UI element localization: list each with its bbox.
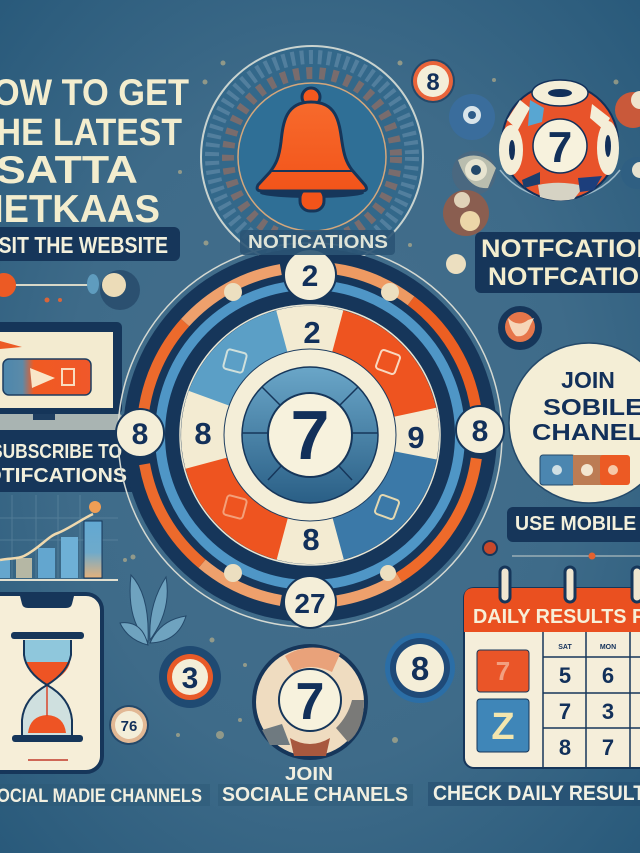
ring balls: 2 <box>302 260 318 293</box>
icon: leaves <box>120 575 186 645</box>
wheel segments <box>178 303 442 567</box>
ring balls <box>116 249 504 628</box>
icon: bell dial <box>201 46 423 268</box>
label: notifications under bell <box>240 230 395 255</box>
panel: join mobile channel: CHANEL <box>532 419 640 445</box>
icon: small lottery balls <box>411 59 640 236</box>
calendar: daily results: Z <box>491 706 515 748</box>
label: notifications under bell: NOTICATIONS <box>248 232 388 252</box>
icon: number 76 ball: 76 <box>121 718 137 735</box>
calendar: daily results: SAT <box>558 644 572 651</box>
icon: main lottery ball <box>499 80 620 201</box>
segment numbers <box>194 315 425 557</box>
segment numbers: 9 <box>407 420 425 455</box>
calendar rings <box>500 567 640 602</box>
segment numbers: 8 <box>302 522 320 557</box>
calendar: daily results: 3 <box>602 699 614 724</box>
chart: rising bars <box>0 495 118 580</box>
calendar: daily results: 7 <box>496 656 510 686</box>
calendar: daily results: 7 <box>559 699 571 724</box>
ring balls: 27 <box>294 588 326 619</box>
icon: small lottery balls: 8 <box>426 69 440 96</box>
wheel <box>73 198 547 672</box>
icon: number 3 ball: 3 <box>182 662 198 695</box>
label: notification notification: NOTFCATION <box>481 235 640 263</box>
icon: number 8 blue ball <box>385 633 455 703</box>
panel: join mobile channel <box>509 343 640 503</box>
icon: social bird badge <box>498 306 542 350</box>
ring balls: 8 <box>472 415 488 448</box>
calendar: daily results: 8 <box>559 735 571 760</box>
icon: main lottery ball: 7 <box>548 123 572 172</box>
segment icons <box>223 349 401 520</box>
icon: laptop <box>0 322 122 430</box>
orange outer ring <box>73 198 547 672</box>
calendar: daily results: MON <box>600 644 616 651</box>
centre hub <box>224 349 396 521</box>
panel: join mobile channel: SOBILE <box>543 394 640 420</box>
icon: timeline marker <box>483 541 640 560</box>
segment numbers: 8 <box>194 416 212 451</box>
calendar: daily results: 6 <box>602 663 614 688</box>
icon: number 8 blue ball: 8 <box>411 650 429 687</box>
icon: number 7 chip: 7 <box>296 673 324 731</box>
label: notification notification <box>475 232 640 293</box>
segment numbers: 2 <box>303 315 321 350</box>
icon: number 3 ball <box>159 646 221 708</box>
icon: hourglass <box>11 632 84 742</box>
calendar: daily results: 7 <box>602 735 614 760</box>
label: join social channels: JOIN <box>285 764 333 784</box>
icon: slider connector <box>0 270 140 310</box>
calendar: daily results: 5 <box>559 663 571 688</box>
icon: number 7 chip <box>252 644 368 760</box>
calendar: daily results <box>464 567 640 768</box>
label: subscribe to notifications <box>0 430 140 492</box>
ring pegs <box>224 283 399 582</box>
icon: number 76 ball <box>109 705 149 745</box>
label: join social channels: SOCIALE CHANELS <box>222 784 408 806</box>
label: join social channels <box>218 764 413 806</box>
ring balls: 8 <box>132 418 148 451</box>
title <box>0 72 189 231</box>
mobile app buttons <box>540 455 630 485</box>
centre hub: 7 <box>291 396 329 474</box>
icon: phone with hourglass <box>0 594 102 772</box>
panel: join mobile channel: JOIN <box>561 367 615 393</box>
label: use mobile app <box>507 507 640 542</box>
icon: cream coin <box>446 254 466 274</box>
icon: bell <box>257 88 366 211</box>
